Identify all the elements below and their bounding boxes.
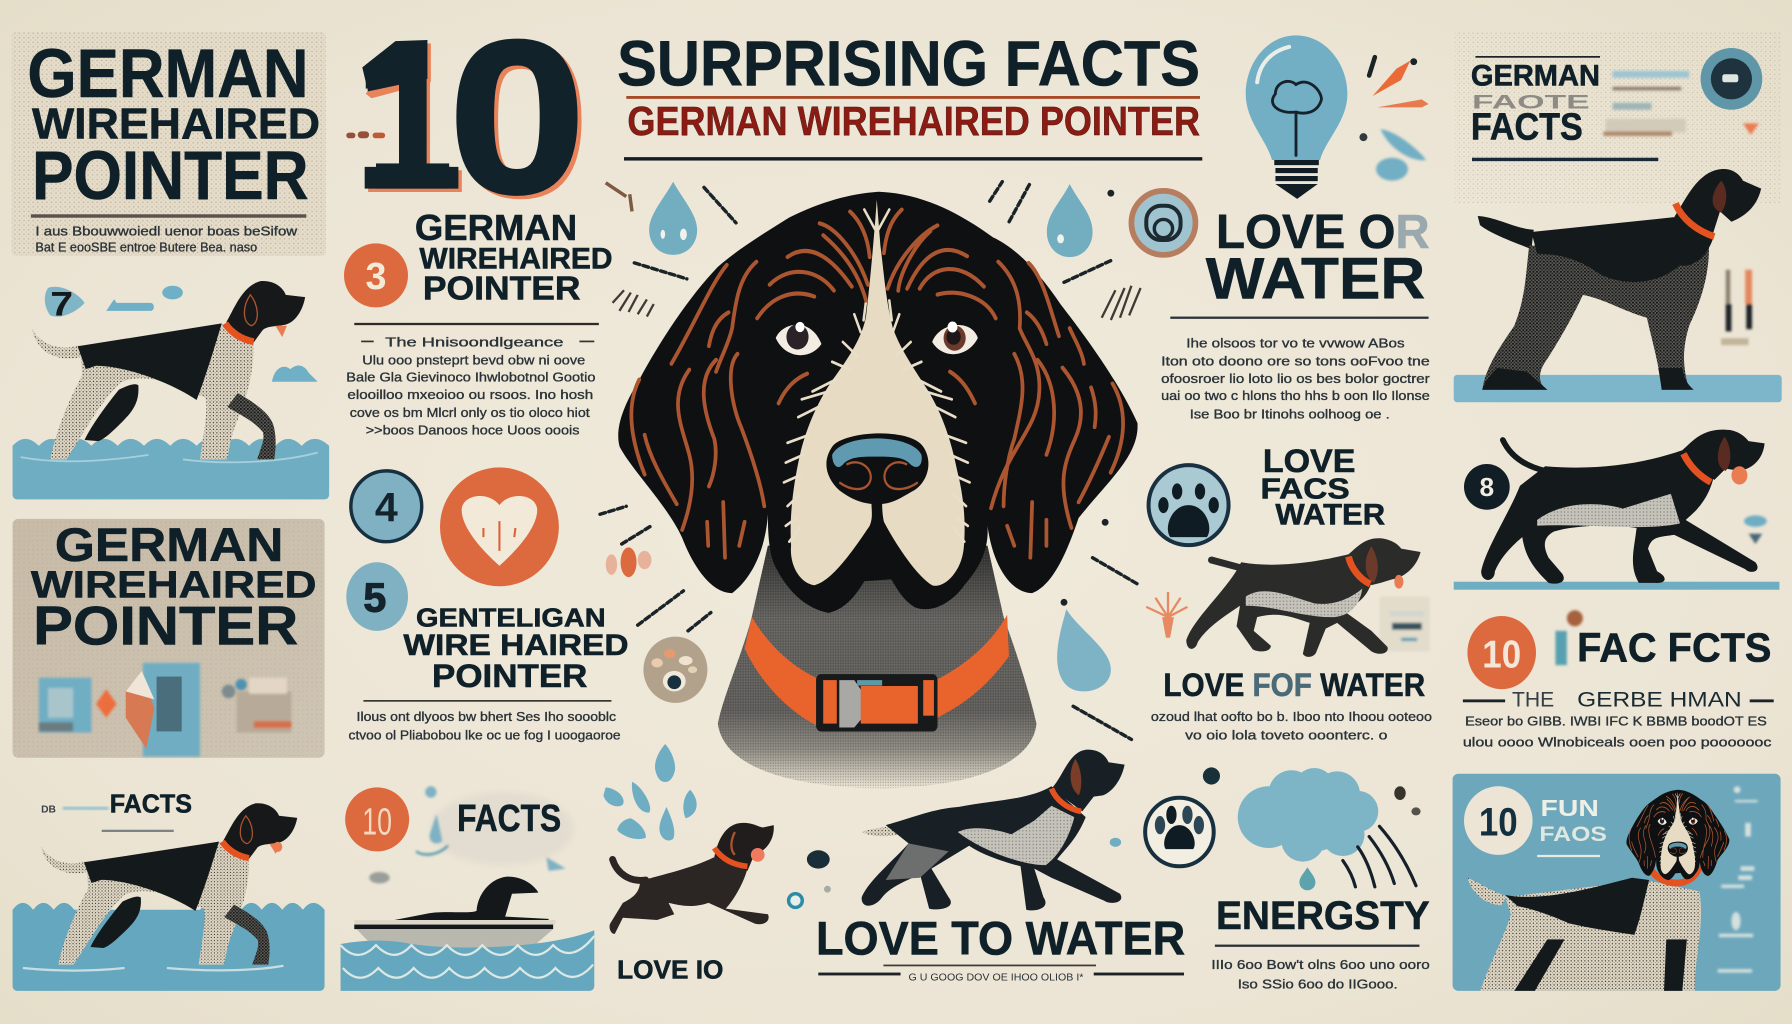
text block: [1151, 709, 1432, 742]
ground: [1454, 375, 1782, 402]
icon: cloud: [1238, 768, 1378, 862]
subheading: THE: [1512, 686, 1554, 711]
label: facts: FACTS: [110, 789, 192, 819]
heading: FACS: [1261, 473, 1350, 505]
section: fact 3: [344, 207, 613, 437]
heading: POINTER: [33, 595, 298, 657]
heading: love to water: LOVE TO WATER: [816, 912, 1185, 964]
icon: boat: [354, 877, 555, 951]
text block: ctvoo ol Pliabobou lke oc ue fog I uoogaoroe: [349, 727, 621, 742]
illustration: central dog portrait: [618, 192, 1138, 788]
text block: elooilloo mxeoioo ou rsoos. Ino hosh: [347, 387, 593, 402]
badge: 10: [1464, 786, 1533, 855]
heading: love to water: G U GOOG DOV OE IHOO OLIOB I*: [909, 973, 1083, 984]
text block: [1463, 714, 1772, 749]
number: big 10: 1: [355, 1, 467, 238]
heading: WATER: [1275, 499, 1385, 532]
dog: front-facing body: [1467, 866, 1701, 991]
text block: Ise Boo br Itinohs oolhoog oe .: [1190, 406, 1390, 421]
text block: [349, 709, 621, 742]
number: big 10: 0: [449, 0, 586, 239]
coat hair strokes: [631, 210, 1123, 558]
icon: number 4 badge: 4: [375, 484, 398, 530]
text block: intro: [35, 223, 298, 254]
ground: [1454, 582, 1779, 590]
section: fact 5: [346, 562, 629, 742]
water: [13, 903, 325, 991]
heading: POINTER: [423, 270, 581, 307]
panel: top-left title: [11, 32, 326, 256]
panel: trotting dog with badge 8: [1454, 430, 1779, 590]
heading: [31, 519, 317, 657]
dog: speckled pointer: [32, 281, 305, 459]
icon: sound arcs: [1343, 826, 1416, 887]
dog face: [618, 192, 1138, 613]
text block: intro: Bat E eooSBE entroe Butere Bea. naso: [35, 239, 257, 254]
icon: number badge: [45, 285, 85, 323]
dog: striding pointer: [862, 750, 1125, 910]
heading: love of water: LOVE FOF WATER: [1163, 667, 1425, 703]
icon: orange burst: [1146, 592, 1187, 637]
badge: 3: [344, 243, 408, 307]
heading: LOVE: [1263, 443, 1355, 479]
heading: [1206, 206, 1430, 311]
icon: white blobs: [1718, 786, 1758, 973]
icon: orange sparks and splashes: [1359, 57, 1429, 181]
collar buckle: [816, 674, 938, 732]
text block: IIIo 6oo Bow't olns 6oo uno ooro: [1211, 957, 1430, 972]
badge: 5: 5: [363, 574, 386, 620]
section: love facs water: [1146, 443, 1432, 742]
text block: uai oo two c hlons tho hhs b oon Ilo Ilonse: [1161, 388, 1430, 403]
number: big 10: [346, 0, 590, 242]
icon: paw badge lower: [1145, 798, 1214, 866]
heading: FAC FCTS: [1577, 625, 1771, 671]
text block: Iton oto doono ore so tons ooFvoo tne: [1161, 354, 1430, 369]
heading: POINTER: [432, 658, 587, 694]
heading: GENTELIGAN: [416, 602, 606, 632]
badge: 10: 10: [1479, 800, 1518, 844]
text block: Iso SSio 6oo do IIGooo.: [1238, 977, 1398, 992]
heading: LOVE OR: [1216, 206, 1430, 259]
icon: large water drop: [1057, 609, 1111, 691]
icon: paw coin: [643, 637, 707, 703]
heading: GERMAN: [55, 519, 283, 571]
text block: Eseor bo GIBB. IWBI IFC K BBMB boodOT ES: [1465, 714, 1767, 729]
section: love of water: [1161, 206, 1430, 421]
icon: small dots: [789, 767, 1220, 907]
icon: blurred teal marker: [1555, 610, 1583, 665]
badge: 10: [345, 787, 409, 851]
badge: 10: [1467, 616, 1536, 689]
panel: facts boat: [341, 786, 594, 991]
badge: 3: 3: [366, 255, 386, 297]
heading: [415, 207, 613, 307]
text block: cove os bm Mlcrl only os tio oloco hiot: [350, 405, 590, 420]
text block: >>boos Danoos hoce Uoos ooois: [366, 422, 580, 437]
heading: FACTS: [457, 797, 561, 839]
heading: WATER: [1206, 246, 1425, 311]
icon: drop: [1299, 867, 1315, 890]
water: [13, 439, 329, 499]
icon: folded panel: [126, 663, 200, 757]
icon: light bulb: [1246, 35, 1347, 199]
heading: GERMAN: [415, 207, 577, 248]
heading: [1539, 795, 1607, 846]
text block: Ilous ont dlyoos bw bhert Ses Iho soooblc: [357, 709, 616, 724]
icon: water drop right: [1047, 184, 1093, 257]
icon: orange diamond: [96, 689, 117, 718]
main title: SURPRISING FACTS: [617, 28, 1200, 100]
collar: [745, 615, 1009, 732]
icon: number badge: 7: [50, 285, 73, 323]
heading: German Wirehaired Pointer: WIREHAIRED: [32, 100, 320, 148]
panel: blue fun facts: [1453, 774, 1781, 991]
main title: [617, 28, 1202, 161]
dog: wire coat standing: [1478, 169, 1761, 390]
group: small water drops: [603, 744, 697, 840]
icon: paw badge: [1149, 465, 1229, 545]
heading: FACTS: [1471, 105, 1583, 147]
icon: small bulb: [1744, 515, 1767, 544]
icon: water drop left: [649, 182, 697, 255]
heading: ENERGSTY: [1216, 894, 1430, 938]
badge: 8: [1464, 464, 1510, 510]
dog: running puppy: [610, 823, 774, 934]
heading: [1261, 443, 1385, 532]
badge: 8: 8: [1480, 472, 1494, 502]
icon: heart: [440, 467, 559, 586]
label: facts: [41, 789, 192, 832]
heading: WIRE HAIRED: [403, 629, 629, 662]
icon: blurred chart: [222, 678, 291, 733]
heading: GERMAN: [1471, 60, 1600, 93]
heading: [403, 602, 629, 694]
heading: WIREHAIRED: [419, 243, 613, 276]
left eye: [776, 322, 821, 355]
icon: dots: [1394, 786, 1421, 815]
text block: Ihe olsoos tor vo te vvwow ABos: [1186, 335, 1405, 350]
text block: [1161, 335, 1430, 421]
icon: drop marks: [369, 786, 566, 883]
water: [341, 930, 594, 991]
text block: ulou oooo Wlnobiceals ooen poo pooooooc: [1463, 734, 1772, 749]
number: big 10: 0: [453, 0, 590, 242]
label: facts: DB: [41, 805, 56, 816]
heading: FAOS: [1539, 821, 1607, 846]
dog: black trotting: [1481, 430, 1765, 584]
icon: small figure: [1721, 270, 1752, 345]
right eye: [932, 321, 978, 354]
muzzle blaze: [791, 200, 965, 586]
dog neck and chest: [718, 546, 1036, 788]
panel: top-right facts and dog: [1454, 32, 1782, 402]
subheading: GERBE HMAN: [1577, 686, 1742, 711]
icon: blue document: [39, 678, 91, 733]
badge: 10: 10: [362, 800, 392, 842]
text block: [346, 334, 595, 437]
subheading: [1512, 686, 1742, 711]
dog: speckled pointer wading: [41, 803, 297, 965]
badge: 5: [346, 562, 408, 631]
icon: number 4 badge: [351, 471, 422, 542]
panel: beige pointer panel: [13, 519, 325, 758]
nose: [826, 433, 928, 504]
dog: dark walking: [1186, 538, 1421, 657]
text block: [1211, 957, 1430, 992]
number: big 10: 1: [352, 0, 464, 235]
heading: WIREHAIRED: [31, 564, 317, 606]
panel: dog in water with facts label: [13, 789, 325, 991]
text block: intro: I aus Bbouwwoiedl uenor boas beSifow: [35, 223, 298, 238]
text block: The Hnisoondlgeance: [385, 334, 563, 349]
text block: ozoud lhat oofto bo b. Iboo nto Ihoou ooteoo: [1151, 709, 1432, 724]
dog: mini portrait: [1626, 790, 1729, 880]
subtitle: GERMAN WIREHAIRED POINTER: [627, 98, 1200, 144]
decorative drops: [600, 182, 1141, 739]
icon: ring badge: [1131, 191, 1195, 255]
blurred bars: [1603, 71, 1759, 136]
haze behind facts label: [432, 792, 574, 865]
text block: ofoosroer lio loto lio os bes bolor goctrer: [1161, 371, 1430, 386]
panel: dog standing in water: [13, 281, 329, 499]
text block: vo oio lola toveto ooonterc. o: [1185, 727, 1387, 742]
badge: 10: 10: [1482, 633, 1521, 676]
heading: FAOTE: [1472, 92, 1590, 114]
box: grey device: [1379, 597, 1430, 651]
heading: FUN: [1541, 795, 1599, 821]
section: energy: [1211, 768, 1430, 992]
heading: [1471, 60, 1600, 147]
heading: German Wirehaired Pointer: [27, 35, 320, 214]
text block: Bale Gla Gievinoco Ihwlobotnol Gootio: [346, 370, 595, 385]
section: fac fcts: [1463, 610, 1774, 749]
icon: round dark badge: [1701, 48, 1762, 110]
label: love 10: LOVE IO: [617, 954, 723, 984]
icon: cloud pieces: [106, 286, 318, 382]
heading: German Wirehaired Pointer: GERMAN: [27, 35, 309, 112]
heading: German Wirehaired Pointer: POINTER: [32, 137, 309, 214]
text block: Ulu ooo pnsteprt bevd obw ni oove: [362, 353, 585, 368]
